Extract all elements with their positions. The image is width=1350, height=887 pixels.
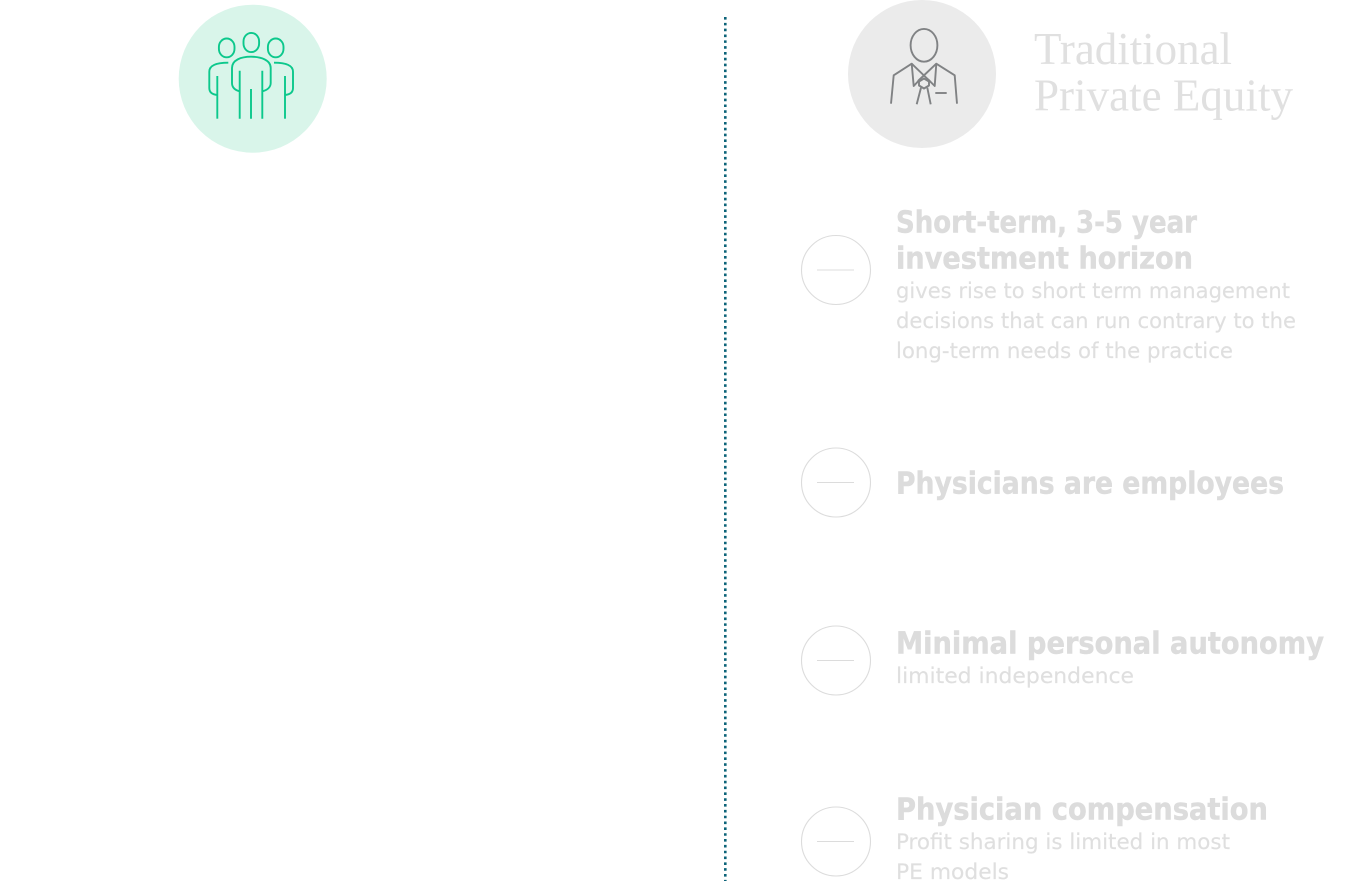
heading and description [896,626,1324,688]
heading and description: decisions that can run contrary to the [896,309,1296,333]
icon: minus circle [802,448,870,517]
title: Traditional Private Equity: Private Equity [1034,70,1293,120]
title: Traditional Private Equity [1034,23,1293,120]
heading and description: gives rise to short term management [896,279,1290,303]
item: minimal personal autonomy [802,626,1324,695]
heading and description: Profit sharing is limited in most [896,830,1230,854]
icon: minus circle [802,626,870,695]
icon: minus circle [802,236,870,304]
item: physician compensation [802,792,1268,884]
item: physicians are employees [802,448,1284,517]
heading and description: PE models [896,860,1009,884]
icon: minus circle [802,807,870,876]
heading and description [896,792,1268,884]
heading and description [896,206,1296,363]
heading and description: limited independence [896,664,1134,688]
heading: Physicians are employees [896,466,1284,502]
icon: businessman in grey circle [848,0,996,148]
heading and description: investment horizon [896,242,1193,276]
title: Traditional Private Equity: Traditional [1034,23,1232,74]
heading and description: long-term needs of the practice [896,339,1233,363]
icon: physician group in green circle [179,5,327,153]
item: short-term investment horizon [802,206,1296,363]
dotted vertical divider [724,17,727,881]
heading and description: Short-term, 3-5 year [896,206,1197,240]
heading and description: Physician compensation [896,792,1268,828]
